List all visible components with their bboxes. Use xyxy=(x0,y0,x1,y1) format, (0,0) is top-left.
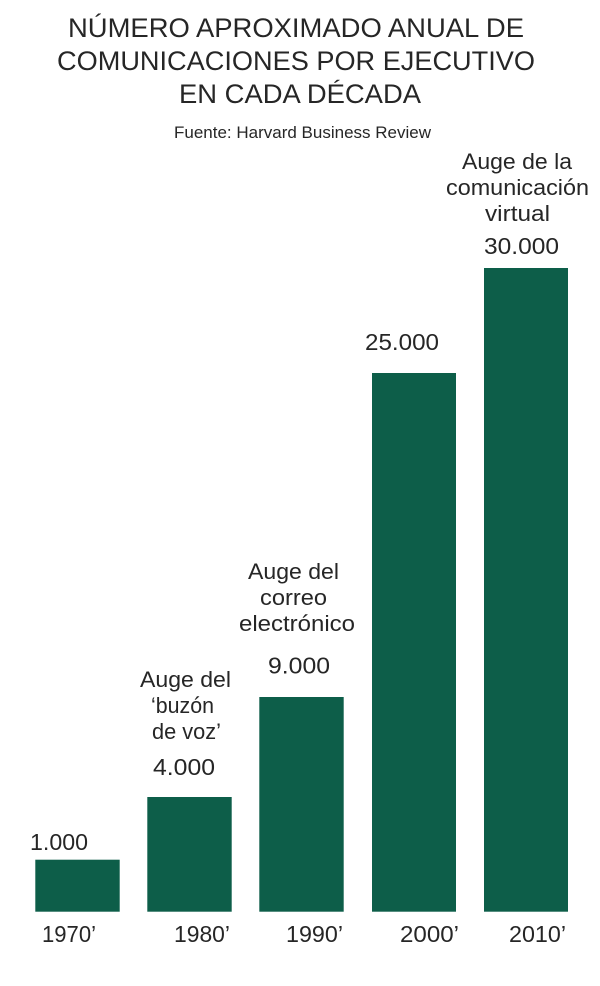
bar: 1970: 1.000 xyxy=(30,829,88,855)
bar: 1990: 9.000 xyxy=(268,652,330,678)
bar chart xyxy=(30,233,568,947)
bar: 2000: 25.000 xyxy=(365,329,439,355)
bar: 1990 xyxy=(259,652,344,947)
annotation: voice mail: ‘buzón xyxy=(151,693,214,718)
annotation: voice mail xyxy=(140,667,231,744)
annotation: voice mail: Auge del xyxy=(140,667,231,692)
bar: 2000: 2000’ xyxy=(400,921,459,947)
title: NÚMERO APROXIMADO ANUAL DE xyxy=(68,13,524,43)
bar: 2010: 2010’ xyxy=(509,921,566,947)
bar: 1980: 1980’ xyxy=(174,921,230,947)
bar: 2010 xyxy=(484,233,568,947)
annotation: voice mail: de voz’ xyxy=(152,719,221,744)
bar: 1980: 4.000 xyxy=(153,754,215,780)
annotation: email: Auge del xyxy=(248,559,339,584)
annotation: virtual communication: comunicación xyxy=(446,175,589,200)
title: COMUNICACIONES POR EJECUTIVO xyxy=(57,46,535,76)
source line: Fuente: Harvard Business Review xyxy=(174,124,431,142)
annotation: email: correo xyxy=(260,585,327,610)
bar: 2010: 30.000 xyxy=(484,233,559,259)
annotation: virtual communication: Auge de la xyxy=(462,149,573,174)
bar: 1970: 1970’ xyxy=(42,921,96,947)
bar: 2000 xyxy=(365,329,459,947)
bar: 1990: 1990’ xyxy=(286,921,343,947)
annotation: virtual communication: virtual xyxy=(485,201,550,226)
annotation: email xyxy=(239,559,355,636)
title: EN CADA DÉCADA xyxy=(179,79,421,109)
annotation: email: electrónico xyxy=(239,611,355,636)
bar: 1970 xyxy=(30,829,120,947)
title xyxy=(57,13,535,109)
bar: 1980 xyxy=(147,754,232,947)
annotation: virtual communication xyxy=(446,149,589,226)
